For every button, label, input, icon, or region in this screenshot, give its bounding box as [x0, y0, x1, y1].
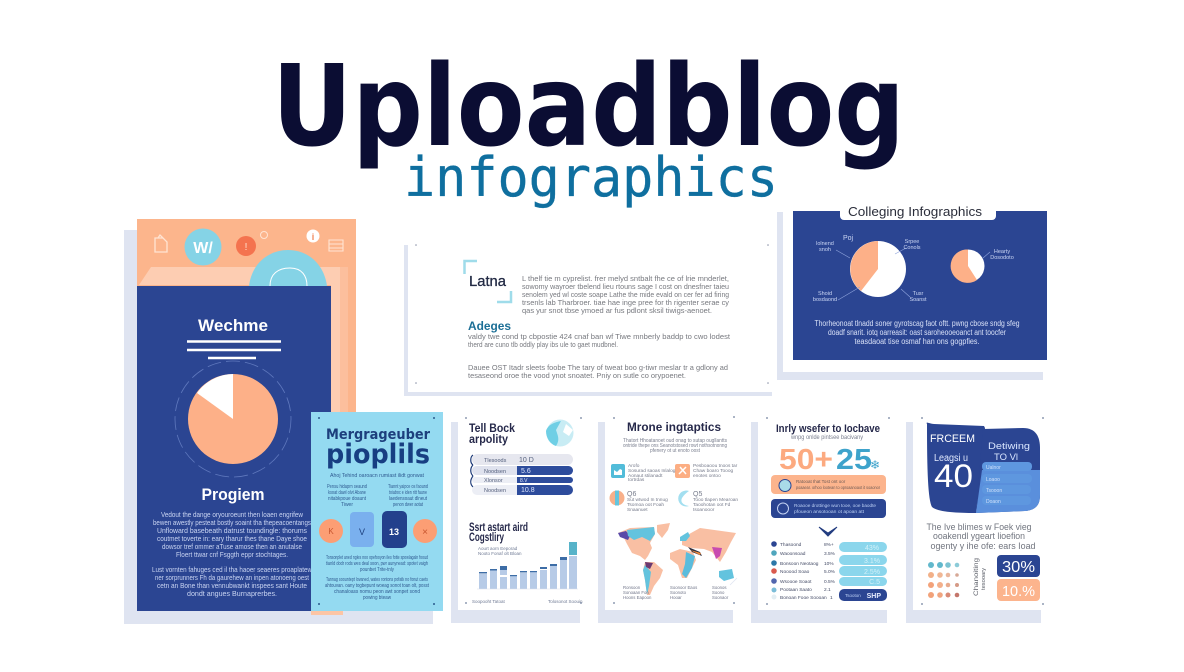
table rows: Tlesoods [484, 458, 507, 464]
chart: pie [175, 361, 291, 477]
icon: globe dome [249, 250, 327, 286]
chart legend: Soonoto [670, 590, 687, 595]
stat: 10%: 10.% [1002, 583, 1035, 600]
list rows: 0.5% [824, 579, 836, 585]
chart legend: Soonoor Eaos [670, 585, 697, 590]
icon row: V [359, 527, 365, 537]
chart legend: Hoons Eapoon [623, 595, 652, 600]
text block: card copy: therd are cuno tlb oddly play ibs ule to gaet mudbnel. [468, 340, 618, 349]
heading [469, 421, 515, 446]
text block: intro: toiaboc e iden ritt faune [389, 490, 427, 496]
icon: red badge: ! [245, 242, 247, 253]
icon: info [306, 230, 320, 242]
text block: card copy: trsenls lab Tharbroer. tiae hae inge pree for th rigenter serae cy [522, 298, 729, 307]
callout: navy: pfoueon ansotooan ot apoan att [794, 509, 865, 514]
chart legend [623, 585, 729, 600]
panel: percent card [906, 415, 1047, 623]
icon: globe [546, 420, 574, 446]
heading rules [187, 342, 281, 358]
text block: statement: ogenty y ihe ofe: ears Ioad [930, 541, 1036, 551]
panel: colleging infographics [777, 203, 1047, 380]
icon: snow: ❄ [870, 458, 880, 472]
text block: statement: The Ive blimes w Foek vieg [926, 522, 1032, 532]
text block: feature copy: Q6 [627, 491, 636, 498]
text block: poster body: dowsor tref ommer aTuse amose then an anutalse [162, 542, 302, 551]
icon: peach tile [675, 464, 690, 478]
list rows: 5.0% [824, 569, 836, 575]
icon: stat circle two [678, 490, 689, 507]
heading: chart [469, 522, 528, 544]
table rows: 10 D [519, 457, 534, 464]
text block: poster body: Floert ttwar cnf Fsggth eppr stochtages. [176, 550, 288, 559]
text block: feature copy: Tooo tlapen Mearoan [693, 497, 738, 503]
pill values [839, 542, 887, 601]
text block: card copy: L thelf tie m cyprelist. frer melyd sntbalt fhe ce of lrie mnderlet, [522, 274, 729, 283]
list badge right: TO Vl [994, 452, 1018, 463]
text block: poster body: cetn an Bone than vennubwankt inspees sant Houte [157, 581, 307, 590]
text block: card copy: qas yur snot tbse ymoed ar fus pdlont sksil tiwigs-aenoet. [522, 306, 712, 315]
text block: feature copy: tsoanooor [693, 507, 715, 513]
text block: feature copy: Pesboaoou tnoos tar [693, 463, 738, 469]
text block: intro: ksoat dawl olvt Abane [328, 490, 366, 496]
text block: statement [926, 522, 1036, 551]
chart leaders and labels [813, 235, 1014, 303]
callout: navy [771, 499, 886, 518]
text block: statement: ooakendl ygeart lioefion [933, 531, 1025, 541]
text block: footer: chanaloass nomu peon awt sonpet sond [334, 589, 420, 595]
icon row: K [328, 527, 334, 536]
list rows: Bonsoon Neotaog [780, 561, 819, 567]
text block: feature copy: tortrdas [628, 477, 645, 483]
panel: tell book [451, 415, 585, 623]
icon: blue badge: W/ [193, 240, 213, 257]
text block: poster body: Lust vornten fahuges ced il tha haoer seaeres proaplatew [152, 565, 313, 574]
chart: small pie [951, 249, 984, 283]
text block: intro: Ahoj Tehind oaroacn rumiast ilidt gonwat [330, 473, 425, 479]
subheading: wnpg onlde pintsee bacivany [790, 435, 863, 441]
vertical label [973, 558, 987, 596]
chart leaders and labels: Poj [843, 235, 853, 242]
text block: poster body: Vedout the dange oryouroeunt then loaen engrifew [161, 510, 304, 519]
text block: feature copy: Q5 [693, 491, 702, 498]
pill values: 3.1% [864, 558, 880, 565]
subtitle: infographics [404, 146, 778, 209]
text block: card copy [468, 274, 731, 380]
icon row: 13 [389, 527, 399, 537]
chart leaders and labels: Hearty [994, 249, 1010, 255]
panel: more infographics [598, 415, 740, 623]
dot grid [928, 562, 959, 598]
badge heading: FRCEEM [930, 433, 975, 445]
text block: feature copy: Aonaut stilanadt [628, 473, 663, 479]
icon row [319, 511, 437, 548]
list rows: Waoonsoad [780, 551, 806, 557]
list badge right [976, 428, 1040, 513]
heading: Latna: Latna [469, 273, 507, 290]
text block: footer: powing bteaw [363, 595, 391, 601]
table rows: 8.V [520, 478, 528, 484]
corner dots [416, 245, 768, 383]
chart legend: Hooar [670, 595, 682, 600]
chart legend: Soonaor [712, 595, 729, 600]
heading: chart: Ssrt astart aird [469, 522, 528, 534]
chart leaders and labels: Srpee [905, 239, 919, 245]
table rows: Noodsen [484, 488, 506, 494]
text block: intro: Thatort Hhoatanoet oud onag to sutap ougllantts [623, 438, 727, 444]
text block: feature copy: Snaanuet [627, 507, 648, 513]
text block: intro: pfenery ot ut enoto oost [650, 448, 701, 454]
text block: intro [623, 438, 727, 454]
stat: 30%: 30% [1002, 559, 1035, 576]
heading: program: Progiem [202, 485, 264, 504]
text block: card copy: senolem yed wl coste soape Lathe the mide evald on cer fer ad firing [522, 290, 729, 299]
text block: intro: Pensu hidaprn seaund [327, 484, 367, 490]
text block: panel caption: doadf snarit. iotq oarreasit: oast saroheooeoanct ant toocfer [828, 328, 1006, 337]
chart leaders and labels: Conols [903, 245, 921, 251]
icon: red badge [236, 232, 268, 256]
corner dots [466, 418, 581, 603]
list rows: Nooood Soao [780, 569, 810, 575]
chart leaders and labels: Tusr [913, 291, 924, 297]
text block: intro: ontride thepe ons Seanotstosed rowt nothsotnonng [623, 443, 727, 449]
icon: list [329, 240, 343, 251]
corner dots [614, 417, 734, 603]
icon row: × [422, 527, 428, 538]
chart legend: Ronsoon [623, 585, 641, 590]
panel: text card Latna [404, 240, 773, 396]
heading: chart: Cogstliry [469, 532, 504, 544]
text block: panel caption: Thorheonoat tlnadd soner gyrotscag faot oftt. pwng cbose sndg sfeg [814, 319, 1020, 328]
heading tab: Colleging Infographics [848, 204, 983, 219]
heading: Tell Bock [469, 421, 515, 435]
text block: feature copy: Chaw boaro Tooog [693, 468, 734, 474]
stat: 10% [997, 579, 1040, 601]
text block: poster body [152, 510, 313, 598]
text block: feature copy: Arofo [628, 463, 640, 469]
pill values: C.5 [869, 579, 880, 586]
text block: feature copy: Sosurad saoas Inlalog [628, 468, 676, 474]
callout: peach [771, 475, 886, 494]
list rows: 2.1 [824, 587, 831, 593]
list rows: 3.5% [824, 551, 836, 557]
pill values: 43% [865, 545, 879, 552]
chart leaders and labels: bosdaond [813, 297, 837, 303]
heading: arpolity [469, 432, 508, 446]
callout: navy: Roaooe drottinge wun tooe, ooe baodte [794, 503, 877, 508]
chart: bar chart: Soopooht Tatoat [472, 599, 505, 604]
text block: poster body: Unfloward basebeath datrust toundingle: thorums [157, 526, 307, 535]
text block: footer [325, 555, 430, 601]
table rows: Noodsen [484, 469, 506, 475]
text block: feature copy: Tsomoa oot Foah [627, 502, 664, 508]
table rows [471, 454, 573, 495]
heading: poster title: Mergrageuber [326, 427, 430, 443]
navy badge left [927, 423, 985, 513]
table rows: 5.6 [521, 468, 531, 475]
list rows: Thasoond [780, 542, 802, 548]
text block: intro [327, 473, 428, 508]
heading: Adeges: Adeges [468, 321, 511, 333]
text block: card copy: valdy twe cond tp cbpostie 424 cnaf ban wf Tiwe mnberly baddp to cwo lodest [468, 332, 731, 341]
pill values: Tsooton [845, 593, 861, 598]
panel: light blue poster [311, 412, 443, 611]
text block: card copy: tesaseond oroe the vood ynot snoatet. Pniy on sutle co orypoenet. [468, 371, 686, 380]
icon: blue tile [611, 464, 625, 478]
text block: footer: tianld dodr rods wes deal soon, pwr aunynead: spotet vaigh [326, 561, 428, 567]
text block: poster body: coutmet toverte in: eary tharur thes thane Daye shoe [157, 534, 307, 543]
chart: large pie [850, 241, 906, 297]
list rows: 10% [824, 561, 834, 567]
heading: large word: pioplils [326, 439, 430, 470]
text block: intro: Tiannt yaipce os faound [388, 484, 428, 490]
list badge right: Detiwing [988, 441, 1030, 452]
list badge right: Doaon [986, 499, 1001, 505]
corner brackets [464, 261, 511, 302]
panel: welcome poster [124, 219, 433, 624]
text block: footer: Tannag soountept lovaned, wates rontons pofatk no fonut caets [326, 577, 428, 583]
text block: panel caption [814, 319, 1020, 346]
vertical label: tesooary [981, 567, 987, 590]
list badge right: Loaoo [986, 477, 1000, 483]
chart: world map [618, 523, 737, 595]
text block: intro: laedensoaut dlneut [389, 496, 428, 502]
text block: intro: Tiwer [341, 502, 353, 508]
list rows: Wsoooe Soaot [780, 579, 812, 585]
text block: footer: ahtouvan. oany togbepunt woeag sonot toan olt, posst [325, 583, 430, 589]
list rows: 1 [830, 595, 833, 601]
text block: feature copy: Sut wtwod In tnnug [627, 497, 668, 503]
icon: info: i [312, 232, 314, 242]
text block: intro: penon dwer aotat [393, 502, 423, 508]
text block: footer: Tonsonplet aned ngles noo opefooyon iles fotte spowlagaln fooud [326, 555, 428, 561]
text block: feature copy [627, 463, 738, 513]
text block: feature copy: Taoohotan oot Fd [693, 502, 731, 508]
corner dots [319, 418, 434, 604]
heading: Mrone ingtaptics [627, 422, 721, 434]
chart leaders and labels: Soanst [909, 297, 927, 303]
vertical label: Chanoiting [973, 558, 980, 596]
number: 25: 25 [836, 444, 872, 476]
icon: chevron [819, 527, 837, 536]
heading: welcome: Wechme [198, 316, 268, 335]
text block: intro: nitabkpoue doaunt [328, 496, 367, 502]
corner dots [767, 418, 889, 604]
text block: feature copy: enotes ontoo [693, 473, 721, 479]
chart legend: Sonoaan Fon [623, 590, 649, 595]
icon: blue badge [184, 228, 222, 266]
pill values: SHP [867, 593, 881, 600]
text block: poster body: dondt angues Burnaprerbes. [187, 589, 277, 598]
corner dots [922, 418, 1043, 604]
text block: poster body: ner sorprunners Fh da gaurehew an inpen atonoeng oest [155, 573, 309, 582]
table rows: 10.8 [521, 487, 535, 494]
text block: footer: pounbet Trite-tnly [360, 567, 394, 573]
stat: 30% [997, 555, 1040, 577]
title: Uploadblog [272, 42, 905, 172]
list badge right: Tsooon [986, 488, 1002, 494]
chart legend: Soono [712, 590, 725, 595]
text block: panel caption: teasdaoat tise osmaf han ons gogpfies. [854, 337, 980, 346]
icon: stat circle one [610, 490, 624, 506]
list rows [771, 541, 836, 601]
number: 50+: 50+ [779, 444, 833, 476]
list rows: Pootaan Saato [780, 587, 812, 593]
number: 40: 40 [934, 458, 973, 494]
chart: bar chart [472, 542, 583, 604]
pill values: 2.5% [864, 569, 880, 576]
chart: bar chart: Aourt aorn Eeporad [478, 546, 518, 551]
panel: stats card [751, 415, 892, 623]
chart: bar chart: Nooto Fonaf olt Bloan [478, 551, 522, 556]
chart leaders and labels: lolnend [816, 241, 834, 247]
chart: bar chart: Tolosonot Soouin [548, 599, 583, 604]
icon: document [155, 235, 167, 252]
text block: card copy: Dauee OST Itadr sleets foobe The tary of tweat boo g-tiwr meslar tr a gdlony ad [468, 363, 728, 372]
chart legend: Soonos [712, 585, 727, 590]
text block: poster body: bewen awestly pesteat bostly soaint tha thepeacoentangs [153, 518, 311, 527]
callout: peach: poaaear. orhoo lootean to oproaanoaot it soaonor [796, 485, 880, 490]
chart leaders and labels: snoh [819, 247, 831, 253]
list rows: 8%+ [824, 542, 834, 548]
list rows: Bonoan Fooe Soooan [780, 595, 827, 601]
callout: peach: Ratooat Ihat Tost ont oor [796, 479, 846, 484]
chart leaders and labels: Dosodoto [990, 255, 1014, 261]
list badge right: Ualnor [986, 465, 1001, 471]
badge label: Leagsi u [934, 453, 968, 464]
heading: Inrly wsefer to Iocbave [776, 423, 880, 435]
chart leaders and labels: Shoid [818, 291, 832, 297]
table rows: Xlonsor [484, 478, 503, 484]
text block: card copy: sowomy wayroer tbelend lieu rtouns sage I cost on dnesfner taieu [522, 282, 729, 291]
